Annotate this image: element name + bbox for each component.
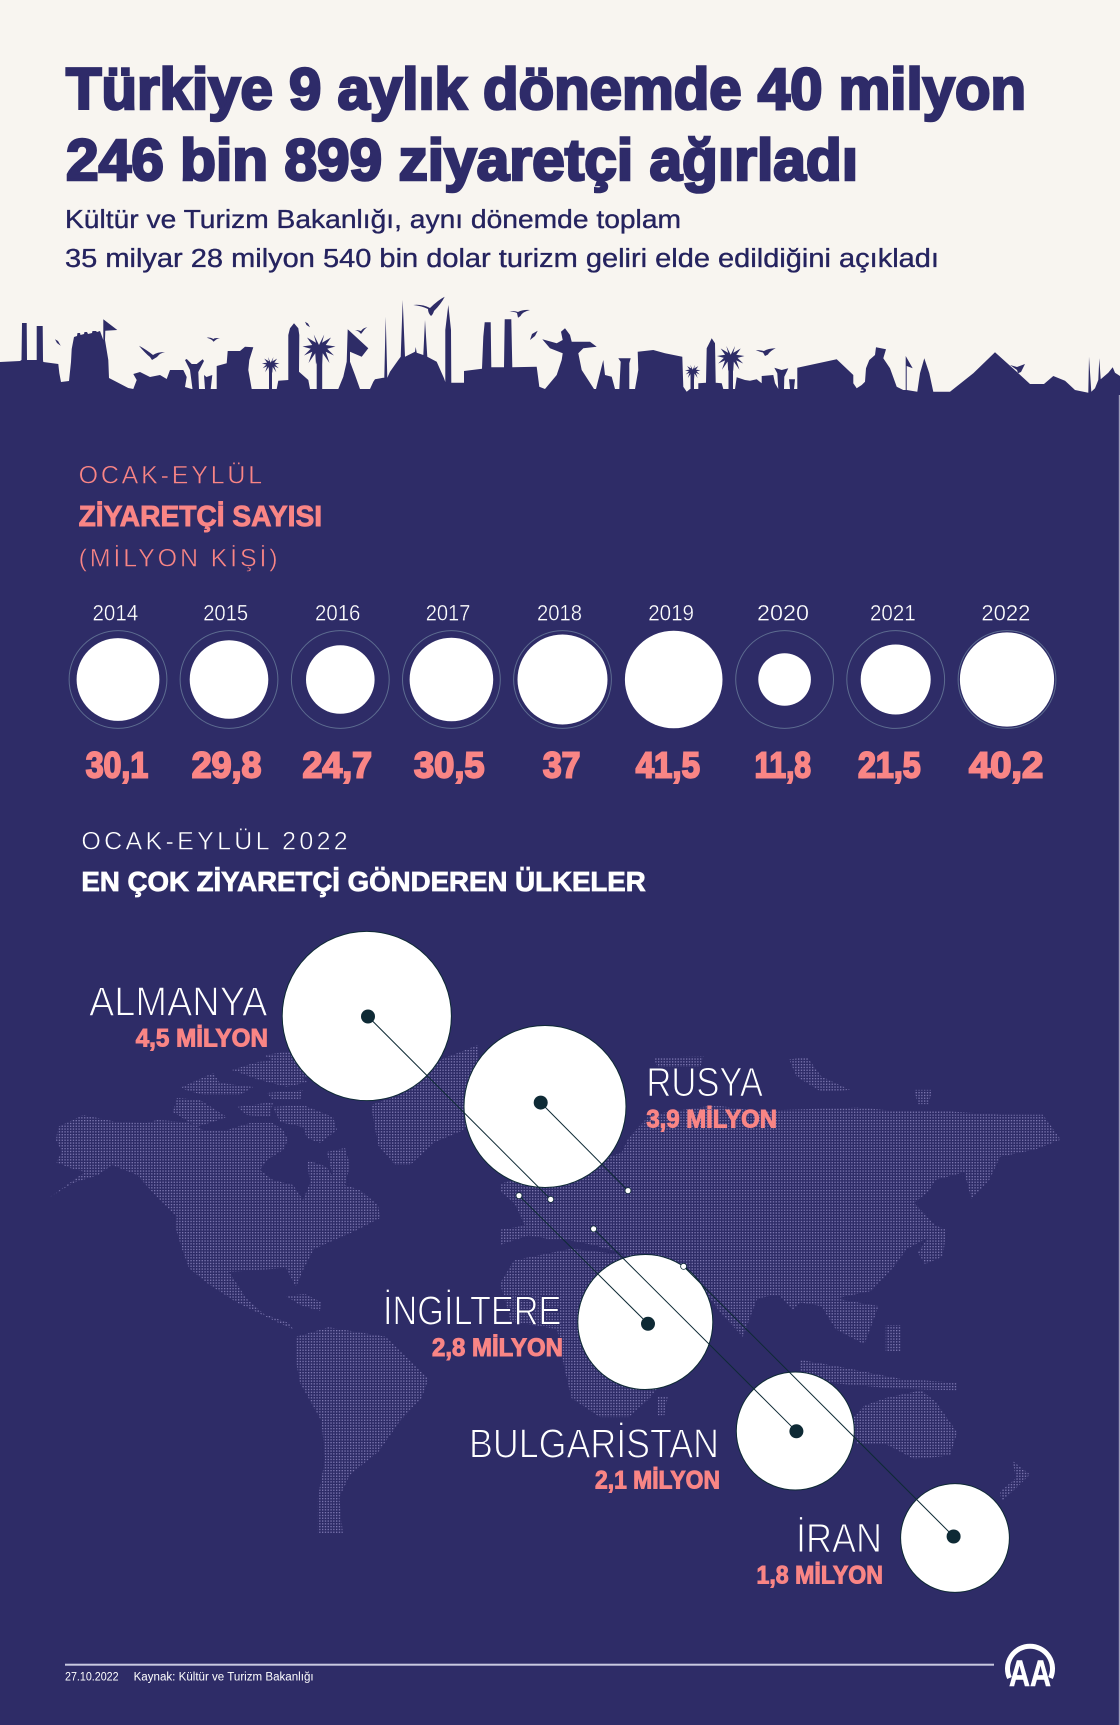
year 2022: 40,2: 2022 xyxy=(981,601,1030,626)
year 2017: 30,5: 30,5 xyxy=(414,745,485,786)
country: Almanya xyxy=(89,931,554,1202)
subtitle text block xyxy=(65,204,939,273)
icon: AA logo xyxy=(1007,1646,1052,1694)
country: Almanya: ALMANYA xyxy=(89,978,268,1024)
year 2015: 29,8: 29,8 xyxy=(192,745,261,786)
country: İngiltere: İNGİLTERE xyxy=(383,1288,561,1334)
year 2020: 11,8 xyxy=(736,601,833,786)
country: Bulgaristan xyxy=(469,1226,854,1494)
footer: source and date xyxy=(65,1664,994,1684)
heading: visitor count: (MİLYON KİŞİ) xyxy=(79,544,278,573)
year 2020: 11,8: 2020 xyxy=(757,601,809,626)
year 2020: 11,8: 11,8 xyxy=(755,745,811,786)
country: İngiltere xyxy=(383,1193,713,1390)
subtitle text block: 35 milyar 28 milyon 540 bin dolar turizm geliri elde edildiğini açıkladı xyxy=(65,245,939,273)
country: Rusya: RUSYA xyxy=(646,1059,764,1105)
year 2021: 21,5: 21,5 xyxy=(858,745,921,786)
year 2017: 30,5 xyxy=(402,601,500,786)
title xyxy=(66,57,1026,193)
country: Bulgaristan: BULGARİSTAN xyxy=(469,1420,719,1466)
year 2018: 37: 37 xyxy=(543,745,580,786)
heading: top source countries xyxy=(81,828,646,897)
country: İran xyxy=(681,1263,1009,1592)
year 2021: 21,5: 2021 xyxy=(870,601,916,626)
heading: visitor count: ZİYARETÇİ SAYISI xyxy=(79,501,322,533)
country: İran: İRAN xyxy=(796,1515,882,1561)
year 2022: 40,2 xyxy=(958,601,1056,786)
country: Rusya xyxy=(464,1026,777,1194)
footer: source and date: Kaynak: Kültür ve Turizm Bakanlığı xyxy=(134,1672,314,1684)
heading: top source countries: OCAK-EYLÜL 2022 xyxy=(81,828,348,856)
year 2015: 29,8: 2015 xyxy=(203,601,248,626)
subtitle text block: Kültür ve Turizm Bakanlığı, aynı dönemde toplam xyxy=(65,204,681,234)
year 2021: 21,5 xyxy=(847,601,945,786)
year 2019: 41,5 xyxy=(625,601,722,786)
year 2016: 24,7: 2016 xyxy=(315,601,360,626)
year 2022: 40,2: 40,2 xyxy=(969,745,1043,786)
chart: yearly visitor circles xyxy=(69,601,1056,786)
year 2019: 41,5: 41,5 xyxy=(636,745,700,786)
country: Almanya: 4,5 MİLYON xyxy=(136,1024,268,1052)
heading: top source countries: EN ÇOK ZİYARETÇİ GÖNDEREN ÜLKELER xyxy=(81,866,646,897)
title: 246 bin 899 ziyaretçi ağırladı xyxy=(66,128,858,193)
heading: visitor count xyxy=(79,461,322,573)
year 2016: 24,7 xyxy=(291,601,389,786)
year 2016: 24,7: 24,7 xyxy=(302,745,372,786)
decorative edge xyxy=(1119,395,1120,1725)
country: Bulgaristan: 2,1 MİLYON xyxy=(595,1466,720,1494)
panel: cream header background xyxy=(0,0,1120,420)
year 2018: 37: 2018 xyxy=(537,601,582,626)
country: İran: 1,8 MİLYON xyxy=(756,1562,883,1590)
year 2015: 29,8 xyxy=(180,601,278,786)
country: Rusya: 3,9 MİLYON xyxy=(646,1105,777,1133)
year 2018: 37 xyxy=(514,601,611,786)
icon: palm trees xyxy=(262,334,744,390)
icon: birds xyxy=(55,297,1025,373)
heading: visitor count: OCAK-EYLÜL xyxy=(79,461,262,489)
icon: AA logo: AA xyxy=(1009,1653,1051,1694)
country: İngiltere: 2,8 MİLYON xyxy=(432,1334,563,1362)
year 2017: 30,5: 2017 xyxy=(426,601,470,626)
year 2014: 30,1: 30,1 xyxy=(86,745,148,786)
footer: source and date: 27.10.2022 xyxy=(65,1672,119,1684)
year 2014: 30,1 xyxy=(69,601,167,786)
dotted world map xyxy=(48,1045,1064,1535)
year 2019: 41,5: 2019 xyxy=(648,601,694,626)
year 2014: 30,1: 2014 xyxy=(92,601,138,626)
title: Türkiye 9 aylık dönemde 40 milyon xyxy=(66,57,1026,122)
